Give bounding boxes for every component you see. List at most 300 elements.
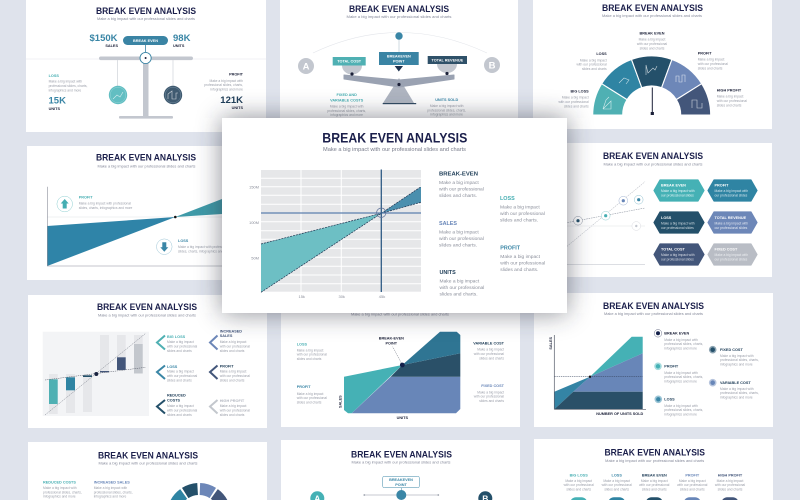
axis label: units sold: NUMBER OF UNITS SOLD <box>596 412 644 416</box>
text: variable cost <box>473 342 505 360</box>
text: loss: slides and charts. <box>500 218 538 224</box>
subtitle: Make a big impact with our professional slides and charts <box>602 14 702 18</box>
label: break even <box>637 32 667 50</box>
item: high profit: Make a big impact <box>220 404 247 408</box>
text: sales: Make a big impact <box>439 230 479 236</box>
column: loss: slides and charts <box>604 488 629 492</box>
text: loss <box>500 196 545 224</box>
subtitle: Make a big impact with our professional slides and charts <box>352 460 451 464</box>
legend: variable cost: infographics and more <box>720 396 753 400</box>
marker A <box>298 58 314 74</box>
label: break-even point <box>379 337 404 346</box>
hexagon: profit: Make a big impact with <box>714 189 748 193</box>
text: units sold <box>427 98 466 116</box>
item: profit: Make a big impact <box>220 370 247 374</box>
break even line chart <box>261 170 421 292</box>
heading: BREAK EVEN ANALYSIS <box>96 6 196 16</box>
item: big loss: Make a big impact <box>167 340 194 344</box>
text: variable cost: VARIABLE COST <box>473 342 505 346</box>
bar chart with trend lines <box>43 332 149 416</box>
item: profit <box>210 364 250 382</box>
legend: break even: professional slides, charts, <box>664 342 703 346</box>
text: break-even: with our professional <box>439 186 484 192</box>
hexagon: loss: Make a big impact with <box>661 222 695 226</box>
hexagon: fixed cost: Make a big impact with <box>714 253 748 257</box>
legend: variable cost: Make a big impact with <box>720 387 754 391</box>
text: profit: PROFIT <box>229 72 244 76</box>
text: profit: Make a big impact <box>500 254 541 260</box>
text: fixed cost: slides and charts <box>479 399 504 403</box>
slider <box>363 488 439 500</box>
legend: profit: infographics and more <box>664 380 697 384</box>
label: break-even point: BREAK-EVEN <box>379 337 404 341</box>
text: loss: LOSS <box>297 343 308 347</box>
item: increased sales: with our professional <box>220 344 250 348</box>
item: increased sales: INCREASED <box>220 329 242 333</box>
box: total cost: TOTAL COST <box>337 60 362 64</box>
label: profit: slides and charts <box>698 66 723 70</box>
text: loss: Make a big impact with professional <box>178 245 230 249</box>
box: breakeven point: BREAKEVEN <box>387 55 411 59</box>
text: loss: Make a big impact <box>500 204 540 210</box>
legend: break even: Make a big impact with <box>664 338 698 342</box>
column: break even: slides and charts <box>642 488 667 492</box>
text: profit: slides, charts, infographics and more <box>79 206 133 210</box>
gauge needle <box>651 88 654 115</box>
subtitle: Make a big impact with our professional slides and charts <box>98 313 196 317</box>
item: high profit: HIGH PROFIT <box>220 399 245 403</box>
label: loss: slides and charts <box>582 67 607 71</box>
label: break even: slides and charts <box>640 46 665 50</box>
text: fixed cost: Make a big impact <box>477 390 504 394</box>
gauge icons <box>603 65 702 109</box>
text: reduced costs: professional slides, charts, <box>43 490 82 494</box>
text: units sold: UNITS SOLD <box>435 98 458 102</box>
text: profit: slides and charts. <box>500 267 538 273</box>
item: profit: slides and charts <box>220 378 245 382</box>
text: fixed and variable costs: professional slides, charts, <box>327 109 366 113</box>
column: big loss: slides and charts <box>566 488 591 492</box>
text: units sold: Make a big impact with <box>430 104 464 108</box>
column: high profit: slides and charts <box>718 488 743 492</box>
text: increased sales: INCREASED SALES <box>94 480 130 484</box>
label: profit: with our professional <box>698 62 728 66</box>
axis label: sales: SALES <box>549 337 553 350</box>
column: big loss: with our professional <box>564 483 594 487</box>
icon: profit arrow <box>57 196 72 212</box>
text: loss: UNITS <box>49 107 60 111</box>
hexagon: total revenue <box>708 212 757 233</box>
box: breakeven point <box>379 52 419 72</box>
pill: break even <box>123 36 168 45</box>
box: breakeven point <box>383 476 419 488</box>
text: fixed and variable costs: infographics and more <box>330 113 363 117</box>
text: loss: infographics and more <box>49 88 81 92</box>
item: reduced costs: REDUCED <box>167 394 186 398</box>
column: big loss: BIG LOSS <box>570 474 588 478</box>
label: high profit: Make a big impact <box>717 94 744 98</box>
text: profit: with our professional <box>297 396 327 400</box>
box: breakeven point: BREAKEVEN <box>389 478 413 482</box>
text: variable cost: Make a big impact <box>477 348 504 352</box>
hexagon: total cost: Make a big impact with <box>661 253 695 257</box>
axis label: sales: SALES <box>338 395 342 408</box>
label: break even: BREAK EVEN <box>640 32 665 36</box>
balance scale <box>99 45 193 119</box>
item: loss: with our professional <box>167 374 198 378</box>
text: variable cost: slides and charts <box>479 356 504 360</box>
column: high profit <box>715 474 745 500</box>
column: big loss: Make a big impact <box>565 479 592 483</box>
item: loss <box>157 365 198 382</box>
text: fixed and variable costs: VARIABLE COSTS <box>330 98 364 102</box>
text: loss: LOSS <box>49 74 59 78</box>
stat: sales: $150K <box>90 33 118 44</box>
hexagon: total cost: our professional slides <box>661 258 694 262</box>
legend: variable cost: professional slides, charts, <box>720 391 759 395</box>
column: profit <box>677 474 708 500</box>
heading: BREAK EVEN ANALYSIS <box>96 153 196 163</box>
box: breakeven point: POINT <box>393 60 405 64</box>
text: break-even: BREAK-EVEN <box>439 172 478 178</box>
label: big loss: Make a big impact <box>562 96 589 100</box>
text: sales: SALES <box>439 221 457 227</box>
axis label: units: UNITS <box>397 416 408 420</box>
text: profit: infographics and more <box>210 88 243 92</box>
item: big loss <box>157 335 198 353</box>
item: loss: slides and charts <box>167 378 192 382</box>
item: increased sales: slides and charts <box>220 349 245 353</box>
column: loss: with our professional <box>602 483 632 487</box>
hexagon: fixed cost <box>708 244 757 265</box>
column: profit: slides and charts <box>680 488 705 492</box>
hexagon: profit <box>708 180 757 201</box>
text: fixed and variable costs: FIXED AND <box>337 93 357 97</box>
text: units <box>440 270 484 298</box>
marker B <box>484 57 500 73</box>
legend: variable cost: VARIABLE COST <box>720 381 751 385</box>
text: variable cost: with our professional <box>474 352 504 356</box>
panel: breakeven slider slide <box>281 440 520 500</box>
legend: fixed cost <box>709 346 759 366</box>
item: reduced costs: Make a big impact <box>167 404 194 408</box>
text: loss: professional slides, charts, <box>49 84 88 88</box>
label: profit: PROFIT <box>698 52 712 56</box>
text: increased sales: Make a big impact with <box>94 486 127 490</box>
item: reduced costs: COSTS <box>167 398 181 402</box>
column: loss: LOSS <box>612 474 622 478</box>
text: profit: Make a big impact with professional <box>79 202 131 206</box>
text: reduced costs: REDUCED COSTS <box>43 480 76 484</box>
x axis labels: 30k <box>338 294 345 299</box>
legend: loss: professional slides, charts, <box>664 408 703 412</box>
y axis labels: 50M <box>251 256 259 260</box>
donut chart <box>175 489 223 500</box>
hexagon: loss: our professional slides <box>661 226 694 230</box>
legend: profit: PROFIT <box>664 364 679 368</box>
text: break-even: slides and charts. <box>439 193 477 199</box>
legend: fixed cost: infographics and more <box>720 362 753 366</box>
heading: BREAK EVEN ANALYSIS <box>602 3 703 13</box>
text: profit: professional slides, charts, <box>204 83 243 87</box>
panel: scale slide <box>26 0 266 132</box>
text: loss: slides, charts, infographics and more <box>178 250 232 254</box>
heading: BREAK EVEN ANALYSIS <box>603 151 703 161</box>
marker A <box>310 491 324 500</box>
item: high profit: with our professional <box>220 408 250 412</box>
label: big loss: with our professional <box>558 100 589 104</box>
item: increased sales: SALES <box>220 334 233 338</box>
icon: loss weight <box>109 86 127 104</box>
label: high profit <box>717 88 747 108</box>
text: loss: with our professional <box>297 352 327 356</box>
text: increased sales <box>94 480 133 499</box>
item: profit: PROFIT <box>220 364 234 368</box>
marker A: A <box>303 62 310 72</box>
legend: fixed cost: FIXED COST <box>720 348 743 352</box>
main card drop shadow <box>222 118 567 313</box>
legend: variable cost <box>709 379 759 400</box>
stacked area chart <box>554 335 646 409</box>
column: high profit: Make a big impact <box>717 479 743 483</box>
text: profit <box>79 196 133 210</box>
heading: BREAK EVEN ANALYSIS <box>349 4 449 14</box>
text: loss: LOSS <box>178 239 189 243</box>
marker B <box>478 491 492 500</box>
text: profit: UNITS <box>232 106 243 110</box>
text: break-even: Make a big impact <box>439 180 479 186</box>
heading: BREAK EVEN ANALYSIS <box>604 448 705 458</box>
line chart with markers <box>565 182 645 264</box>
legend: break even: BREAK EVEN <box>664 332 689 336</box>
text: reduced costs: Make a big impact with <box>43 486 77 490</box>
subtitle: Make a big impact with our professional slides and charts <box>604 312 703 316</box>
text: profit: 121K <box>220 95 243 106</box>
text: units: UNITS <box>440 270 456 276</box>
label: break-even point: POINT <box>385 342 398 346</box>
panel: stacked area slide <box>534 293 773 427</box>
item: big loss: slides and charts <box>167 349 192 353</box>
legend: loss <box>654 396 703 416</box>
item: reduced costs <box>157 394 198 417</box>
item: profit: with our professional <box>220 374 250 378</box>
heading: BREAK EVEN ANALYSIS <box>97 302 197 312</box>
legend: fixed cost: Make a big impact with <box>720 354 754 358</box>
column: high profit: HIGH PROFIT <box>718 474 743 478</box>
stat: sales: SALES <box>105 44 118 48</box>
text: profit: Make a big impact with <box>209 79 243 83</box>
label: big loss: BIG LOSS <box>571 90 589 94</box>
legend: profit: professional slides, charts, <box>664 375 703 379</box>
hexagon: fixed cost: our professional slides <box>714 258 748 262</box>
text: increased sales: professional slides, charts, <box>94 490 133 494</box>
label: high profit: HIGH PROFIT <box>717 88 742 92</box>
column: break even: with our professional <box>639 483 670 487</box>
hexagon: total revenue: our professional slides <box>714 226 748 230</box>
subtitle: Make a big impact with our professional slides and charts <box>346 15 452 19</box>
text: loss <box>297 343 327 361</box>
legend: loss: infographics and more <box>664 412 697 416</box>
stat: units: 98K <box>173 33 191 44</box>
stat: units: UNITS <box>173 44 185 48</box>
panel: wedge chart slide <box>27 146 267 280</box>
panel: five columns slide <box>534 439 773 500</box>
hexagon: total revenue: Make a big impact with <box>714 222 748 226</box>
subtitle: Make a big impact with our professional slides and charts <box>97 17 195 21</box>
label: loss: LOSS <box>596 52 607 56</box>
wedge chart <box>47 187 225 266</box>
subtitle: Make a big impact with our professional slides and charts <box>98 462 198 466</box>
hexagon: loss: LOSS <box>661 216 672 220</box>
text: loss <box>48 74 88 111</box>
main heading: BREAK EVEN ANALYSIS <box>322 129 467 145</box>
label: profit: Make a big impact <box>698 58 725 62</box>
label: loss: with our professional <box>576 62 607 66</box>
main subtitle: Make a big impact with our professional slides and charts <box>323 147 466 153</box>
item: reduced costs: slides and charts <box>167 413 192 417</box>
item: high profit <box>210 399 250 417</box>
item: high profit: slides and charts <box>220 413 245 417</box>
text: loss: with our professional <box>500 211 545 217</box>
hexagon: total revenue: TOTAL REVENUE <box>714 216 747 220</box>
column: break even: BREAK EVEN <box>642 474 667 478</box>
item: loss: Make a big impact <box>167 370 194 374</box>
column: profit: with our professional <box>677 483 708 487</box>
icon: profit weight <box>164 86 182 104</box>
label: high profit: slides and charts <box>717 104 742 108</box>
seesaw <box>342 64 457 104</box>
text: sales <box>439 221 484 248</box>
text: increased sales: infographics and more <box>94 495 126 499</box>
label: loss <box>576 52 607 71</box>
hexagon: total cost: TOTAL COST <box>661 248 686 252</box>
y axis labels: 100M <box>249 220 259 225</box>
heading: BREAK EVEN ANALYSIS <box>603 301 704 311</box>
legend: profit: Make a big impact with <box>664 371 698 375</box>
label: profit <box>698 52 728 70</box>
legend: profit <box>654 362 703 384</box>
column: loss <box>602 474 632 500</box>
text: profit: PROFIT <box>297 385 311 389</box>
column: break even <box>639 474 670 500</box>
x axis labels <box>298 294 385 299</box>
hexagon: profit: PROFIT <box>714 184 729 188</box>
subtitle: Make a big impact with our professional slides and charts <box>98 165 196 169</box>
icon: loss arrow <box>156 239 172 254</box>
label: big loss: slides and charts <box>564 104 589 108</box>
subtitle: Make a big impact with our professional slides and charts <box>605 459 704 463</box>
text: fixed cost: with our professional <box>474 394 504 398</box>
text: units: Make a big impact <box>440 278 480 284</box>
column: profit: PROFIT <box>685 474 700 478</box>
box: breakeven point: POINT <box>395 483 407 487</box>
text: loss: LOSS <box>500 196 515 202</box>
legend: break even <box>654 330 703 350</box>
legend: loss: Make a big impact with <box>664 404 698 408</box>
column: big loss <box>564 474 594 500</box>
text: units sold: infographics and more <box>430 112 463 116</box>
text: profit: Make a big impact <box>297 392 324 396</box>
x axis labels: 15k <box>298 294 305 299</box>
column: high profit: with our professional <box>715 483 745 487</box>
marker B: B <box>489 60 496 72</box>
panel: bar and chevron slide <box>28 295 267 428</box>
subtitle: Make a big impact with our professional slides and charts <box>604 162 703 166</box>
hexagon: fixed cost: FIXED COST <box>714 248 738 252</box>
text: profit: PROFIT <box>500 246 521 252</box>
layered area chart <box>344 332 460 413</box>
text: profit: slides and charts <box>297 400 322 404</box>
hexagon: total cost <box>654 244 704 265</box>
item: increased sales <box>210 329 250 353</box>
legend: loss: LOSS <box>664 397 675 401</box>
text: reduced costs <box>43 480 82 499</box>
text: loss: Make a big impact <box>297 348 324 352</box>
text: fixed cost <box>474 384 505 403</box>
hexagon: loss <box>654 212 704 233</box>
box: total revenue: TOTAL REVENUE <box>431 58 464 62</box>
hexagon: break even: Make a big impact with <box>661 189 695 193</box>
semicircular gauge <box>593 56 711 115</box>
panel: gauge slide <box>533 0 772 129</box>
panel: area chart slide <box>281 296 520 427</box>
column: profit: Make a big impact <box>679 479 706 483</box>
pill: break even: BREAK EVEN <box>133 39 158 43</box>
text: sales: slides and charts. <box>439 242 477 248</box>
item: big loss: with our professional <box>167 344 198 348</box>
box: total cost <box>333 57 366 66</box>
panel: main break even chart card <box>222 118 567 313</box>
label: loss: Make a big impact <box>580 58 607 62</box>
panel: balance beam slide <box>280 0 518 123</box>
text: fixed and variable costs <box>327 93 366 117</box>
heading: BREAK EVEN ANALYSIS <box>351 450 452 460</box>
hexagon: profit: our professional slides <box>714 194 748 198</box>
label: big loss <box>558 90 589 108</box>
text: profit <box>500 246 545 273</box>
text: reduced costs: infographics and more <box>43 495 76 499</box>
label: break even: Make a big impact <box>639 38 665 42</box>
x axis labels: 45k <box>379 294 385 299</box>
y axis labels <box>249 184 259 260</box>
hexagon: break even: our professional slides <box>661 194 694 198</box>
legend: break even: infographics and more <box>664 346 697 350</box>
text: fixed cost: FIXED COST <box>481 384 505 388</box>
item: increased sales: Make a big impact <box>220 340 247 344</box>
subtitle: Make a big impact with our professional slides and charts <box>351 312 449 316</box>
text: loss: slides and charts <box>297 357 322 361</box>
panel: donut slide <box>28 442 267 500</box>
text: profit: PROFIT <box>79 196 93 200</box>
panel: hexagon slide <box>533 143 772 277</box>
text: loss: Make a big impact with <box>49 80 82 84</box>
hexagon: break even <box>654 180 704 201</box>
item: big loss: BIG LOSS <box>167 335 186 339</box>
item: reduced costs: with our professional <box>167 408 198 412</box>
column: break even: Make a big impact <box>641 479 668 483</box>
text: units: slides and charts. <box>440 292 478 298</box>
label: high profit: with our professional <box>717 99 747 103</box>
heading: BREAK EVEN ANALYSIS <box>98 450 198 460</box>
hexagon: break even: BREAK EVEN <box>661 184 686 188</box>
text: loss: 15K <box>48 96 66 106</box>
column: loss: Make a big impact <box>603 479 630 483</box>
text: units sold: professional slides, charts, <box>427 108 466 112</box>
text: profit <box>204 72 244 110</box>
text: profit: with our professional <box>500 260 545 266</box>
y axis labels: 150M <box>249 184 259 190</box>
label: break even: with our professional <box>637 42 667 46</box>
